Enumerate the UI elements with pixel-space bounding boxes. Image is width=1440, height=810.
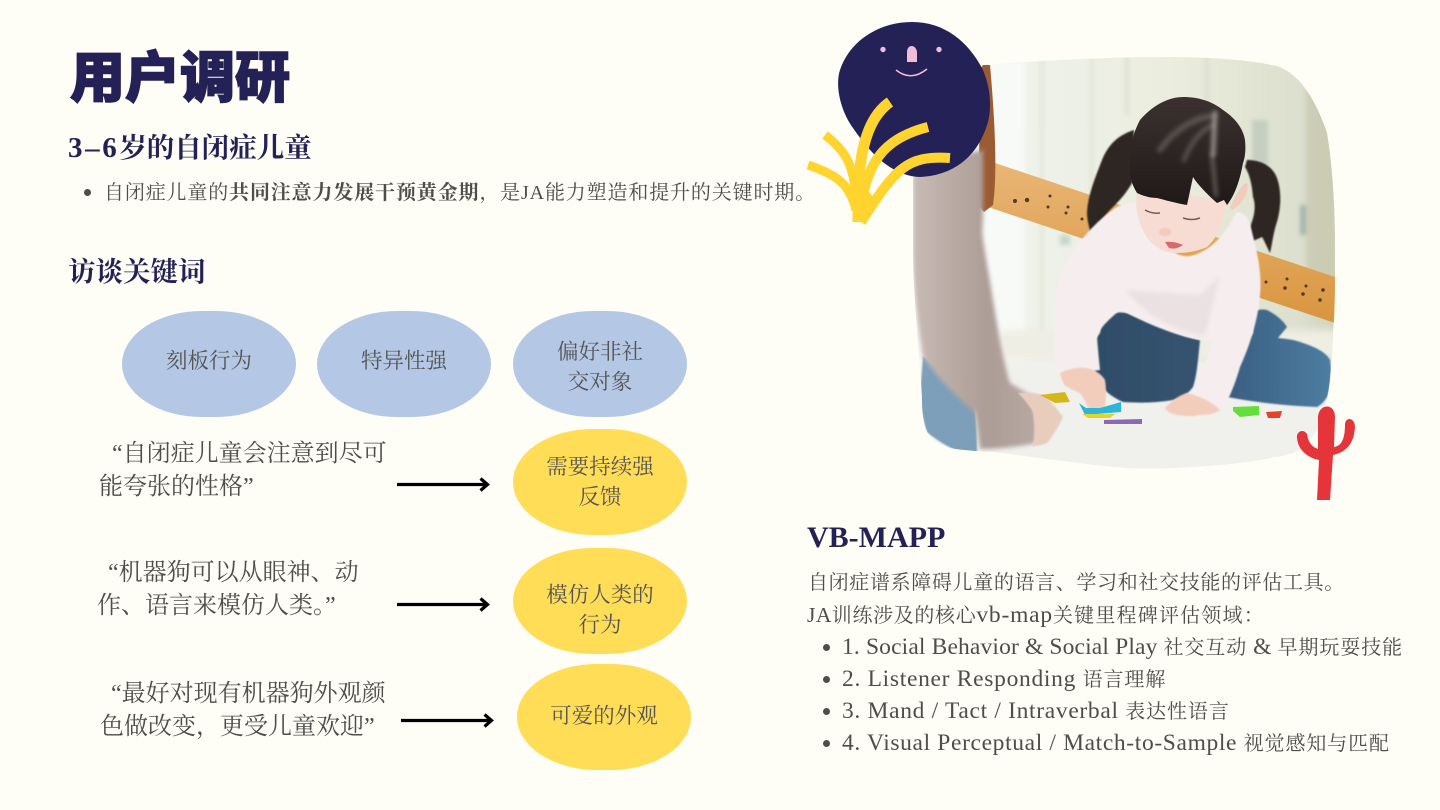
list: VB-MAPP domains: 3. Mand / Tact / Intraverbal 表达性语言 [842,698,1230,724]
quote 1 [99,440,387,500]
arrow 2 [397,597,490,612]
shirt body [1054,203,1261,410]
bullet: intervention window: 自闭症儿童的共同注意力发展干预黄金期，是JA能力塑造和提升的关键时期。 [104,182,816,204]
quote 1: 能夸张的性格” [99,474,254,500]
heading: interview keywords: 访谈关键词 [68,256,206,287]
keyword bubble [317,311,491,417]
text: VB-MAPP description [807,572,1345,628]
insight bubble 2 [513,548,687,654]
photo: child playing with toys [913,57,1335,468]
keyword bubble [513,311,687,417]
quote 3: 色做改变，更受儿童欢迎” [100,714,375,740]
quote 2: 作、语言来模仿人类。” [97,593,336,619]
insight bubble 2: 行为 [578,613,622,637]
face [1136,190,1228,253]
floor [1000,330,1340,360]
quote 2: “机器狗可以从眼神、动 [108,560,359,586]
insight bubble 3: 可爱的外观 [550,704,658,728]
keyword bubble: 刻板行为 [166,349,252,373]
left pigtail [1087,130,1134,237]
icon: yellow grass [806,98,950,225]
adult hair [978,65,995,212]
adult hand [1018,393,1063,446]
adult sweater [913,150,1037,449]
title: 用户调研 [70,47,290,109]
hands [1060,368,1106,414]
list: VB-MAPP domains [823,634,1403,756]
keyword bubble: 交对象 [568,370,632,394]
list: VB-MAPP domains: 4. Visual Perceptual / Match-to-Sample 视觉感知与匹配 [842,730,1390,756]
heading: target users: 3–6岁的自闭症儿童 [68,132,312,164]
hair highlights [1160,113,1216,195]
quote 2 [97,560,359,619]
plank [988,163,1335,323]
quote 1: “自闭症儿童会注意到尽可 [112,441,387,467]
text: VB-MAPP description: 自闭症谱系障碍儿童的语言、学习和社交技能的评估工具。 [808,572,1345,594]
icon: navy smiling blob [838,22,990,177]
wall [916,57,1335,464]
text: VB-MAPP description: JA训练涉及的核心vb-map关键里程碑评估领域： [807,602,1265,628]
arrow 3 [401,713,494,728]
heading: VB-MAPP: VB-MAPP [807,521,945,554]
right pigtail [1244,159,1282,254]
toys [1040,392,1070,403]
insight bubble 1: 需要持续强 [546,455,654,479]
insight bubble 3 [517,664,691,770]
quote 3 [100,680,386,740]
adult jeans [920,356,977,452]
insight bubble 2: 模仿人类的 [546,583,654,607]
list: VB-MAPP domains: 2. Listener Responding 语言理解 [842,666,1166,692]
pants: left leg [1092,312,1200,403]
insight bubble 1: 反馈 [578,485,622,509]
keyword bubble [122,311,296,417]
ear [1230,183,1248,210]
arrow 1 [397,477,490,492]
pants: right leg [1215,309,1331,407]
insight bubble 1 [513,429,687,535]
quote 3: “最好对现有机器狗外观颜 [111,681,386,707]
facial features [1145,210,1200,220]
keyword bubble: 特异性强 [361,349,447,373]
keyword bubble: 偏好非社 [557,340,643,364]
hair [1130,97,1245,205]
list: VB-MAPP domains: 1. Social Behavior & Social Play 社交互动 & 早期玩耍技能 [842,634,1403,660]
